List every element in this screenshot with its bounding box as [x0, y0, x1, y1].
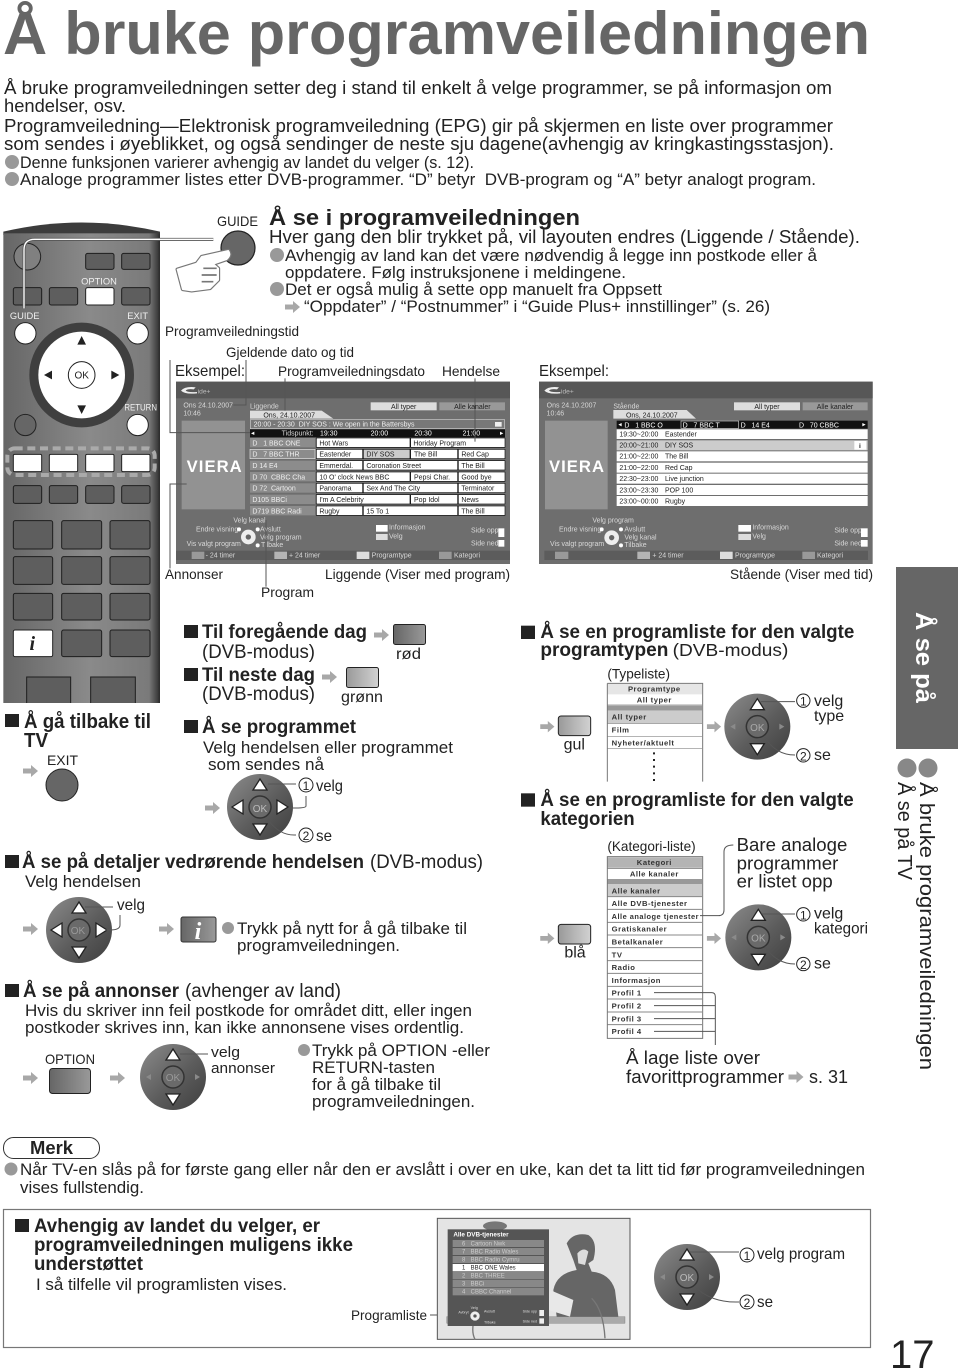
- screen: portrait program guide: The Bill: [665, 454, 689, 461]
- section: event details: Trykk på nytt for å gå tilbake til: [237, 919, 467, 938]
- note: Merk: [30, 1138, 74, 1158]
- intro text block: Denne funksjonen varierer avhengig av landet du velger (s. 12).: [20, 154, 474, 172]
- icon: pointing hand: [177, 251, 230, 291]
- screen: landscape program guide: Velg program: [260, 534, 302, 541]
- section: previous day: [184, 622, 426, 663]
- category table: Alle kanaler: [612, 886, 661, 895]
- screen: landscape program guide: ide+: [198, 388, 211, 395]
- category table: Betalkanaler: [612, 937, 663, 946]
- section: advertisements: Å se på annonser: [23, 981, 180, 1002]
- screen: landscape program guide: Pepsi Char.: [414, 474, 450, 481]
- guide connector line: [24, 239, 213, 308]
- screen: programme list: [437, 1218, 630, 1339]
- screen: landscape program guide: Vis valgt program: [187, 541, 241, 548]
- screen: landscape program guide: Velg kanal: [233, 518, 266, 525]
- screen: programme list: BBCi: [471, 1282, 484, 1288]
- remote button captions: GUIDE: [10, 311, 39, 321]
- screen: portrait program guide: 22:30~23:00: [619, 476, 658, 483]
- section: watch the programme: Å se programmet: [202, 717, 357, 738]
- panel: guide not supported: Programliste: [351, 1307, 427, 1323]
- guide section text: Avhengig av land kan det være nødvendig å legge inn postkode eller å: [285, 246, 818, 265]
- screen: landscape program guide: Panorama: [319, 486, 352, 493]
- section: advertisements: (avhenger av land): [185, 981, 341, 1002]
- screen: portrait program guide: Velg: [752, 533, 766, 540]
- screen annotations: Program: [261, 584, 314, 600]
- screen: landscape program guide: D 14 E4: [252, 463, 278, 470]
- screen: landscape program guide: The Bill: [461, 508, 485, 515]
- remote button captions: [10, 276, 157, 413]
- screen: landscape program guide: Side ned: [471, 540, 499, 547]
- screen: landscape program guide: [170, 360, 510, 587]
- screen: landscape program guide: 19:30: [320, 431, 338, 438]
- section: category list: kategorien: [540, 809, 635, 830]
- section: programme type list: Å se en programliste for den valgte: [540, 622, 854, 643]
- section: next day: grønn: [341, 689, 383, 706]
- screen: portrait program guide: D 7 BBC T: [683, 422, 721, 429]
- screen: portrait program guide: Velg program: [592, 518, 634, 525]
- side tab: Å se på: [910, 612, 938, 704]
- screen: landscape program guide: Tilbake: [261, 542, 283, 549]
- panel: guide not supported: velg program: [757, 1246, 845, 1263]
- category table: Profil 3: [612, 1014, 642, 1023]
- screen: landscape program guide: All typer: [391, 404, 417, 411]
- intro text block: Å bruke programveiledningen setter deg i stand til enkelt å velge programmer, se på informasjon om: [4, 78, 832, 98]
- section: category list: 1: [800, 908, 807, 922]
- screen: landscape program guide: Tidspunkt:: [282, 431, 314, 438]
- section: programme type list: 2: [800, 749, 807, 763]
- screen: landscape program guide: Sex And The City: [366, 486, 421, 493]
- intro text block: hendelser, osv.: [4, 96, 126, 116]
- screen: landscape program guide: D 70 CBBC Cha: [252, 474, 305, 481]
- section: category list: kategori: [814, 920, 868, 937]
- panel: guide not supported: I så tilfelle vil programlisten vises.: [36, 1275, 287, 1294]
- remote button captions: EXIT: [127, 311, 148, 321]
- type list table: Programtype: [628, 685, 681, 694]
- screen: programme list: Alle DVB-tjenester: [453, 1232, 509, 1239]
- remote button captions: OPTION: [81, 276, 117, 286]
- navigation pad: [227, 774, 293, 840]
- section: category list: [521, 790, 868, 1045]
- screen: landscape program guide: Ons, 24.10.2007: [263, 412, 315, 419]
- panel: guide not supported: understøttet: [34, 1254, 144, 1275]
- section: watch the programme: [184, 717, 453, 845]
- type list table: [607, 683, 703, 782]
- navigation ring: [29, 323, 134, 427]
- screen annotations: Programveiledningstid: [165, 323, 299, 339]
- screen annotations: Eksempel:: [175, 363, 245, 380]
- info button: [13, 630, 53, 657]
- section: programme type list: [521, 622, 854, 782]
- screen: landscape program guide: 21:00: [463, 431, 480, 438]
- screen annotations: Programveiledningsdato: [278, 363, 425, 379]
- info button: i: [30, 633, 36, 655]
- info button: i: [195, 919, 202, 945]
- screen: portrait program guide: Velg kanal: [624, 534, 657, 541]
- section: event details: [5, 852, 483, 963]
- screen: portrait program guide: 19:30~20:00: [619, 432, 658, 439]
- screen: landscape program guide: Programtype: [372, 552, 412, 559]
- screen annotations: Annonser: [165, 566, 223, 582]
- screen: landscape program guide: Horiday Program: [413, 440, 466, 447]
- panel: guide not supported: 1: [744, 1249, 751, 1263]
- screen: portrait program guide: Tilbake: [624, 542, 647, 549]
- section: category list: velg: [814, 905, 843, 922]
- guide button illustration: GUIDE: [217, 213, 258, 229]
- screen: landscape program guide: Ons 24.10.2007: [183, 403, 233, 410]
- screen: landscape program guide: D105 BBCi: [252, 497, 287, 504]
- guide section text: Hver gang den blir trykket på, vil layouten endres (Liggende / Stående).: [269, 227, 860, 247]
- type list table: All typer: [637, 695, 672, 704]
- screen: programme list: Cartoon Nwk: [471, 1242, 505, 1248]
- section: programme type list: velg: [814, 693, 843, 710]
- screen: landscape program guide: Emmerdal.: [319, 463, 353, 470]
- screen: landscape program guide: - 24 timer: [206, 552, 236, 559]
- intro text block: [4, 78, 834, 189]
- category table: Profil 4: [612, 1027, 642, 1036]
- screen: landscape program guide: News: [461, 497, 479, 504]
- section: watch the programme: se: [316, 828, 332, 845]
- navigation pad: [140, 1044, 206, 1110]
- section: programme type list: se: [814, 747, 831, 764]
- section: programme type list: (DVB-modus): [673, 640, 788, 660]
- section: programme type list: gul: [564, 737, 585, 754]
- screen: landscape program guide: Kategori: [454, 552, 480, 559]
- category table: Profil 2: [612, 1002, 642, 1011]
- screen: portrait program guide: Eastender: [665, 432, 698, 439]
- screen annotations: [165, 323, 873, 600]
- screen: landscape program guide: DIY SOS: [366, 452, 395, 459]
- screen: portrait program guide: Ons 24.10.2007: [547, 403, 596, 410]
- screen: portrait program guide: 20:00~21:00: [619, 443, 658, 450]
- side tab bullets: [898, 758, 938, 778]
- screen: landscape program guide: D 7 BBC THR: [252, 452, 300, 459]
- section: back to tv: Å gå tilbake til: [24, 709, 151, 733]
- section: category list: er listet opp: [737, 871, 833, 892]
- side tab subtitles: Å bruke programveiledningen: [915, 782, 938, 1070]
- screen: landscape program guide: 15 To 1: [366, 508, 389, 515]
- remote button captions: RETURN: [124, 403, 157, 413]
- screen: portrait program guide: [539, 382, 873, 564]
- section: advertisements: for å gå tilbake til: [312, 1075, 441, 1094]
- screen: programme list: CBBC Channel: [471, 1290, 511, 1296]
- note: Når TV-en slås på for første gang eller når den er avslått i over en uke, kan det ta litt tid før programveiledningen: [20, 1160, 865, 1179]
- section: watch the programme: 2: [303, 829, 310, 843]
- screen: portrait program guide: Live junction: [665, 476, 704, 483]
- intro text block: som sendes i øyeblikket, og også sendinger de neste sju dagene(avhengig av kringkastingsstasjon).: [4, 134, 834, 154]
- panel: guide not supported: se: [757, 1294, 773, 1311]
- screen: landscape program guide: 20:00: [371, 431, 388, 438]
- intro text block: Analoge programmer listes etter DVB-programmer. “D” betyr DVB-program og “A” betyr analogt program.: [20, 171, 816, 189]
- guide section text: Det er også mulig å sette opp manuelt fra Oppsett: [285, 280, 662, 299]
- note: [4, 1138, 865, 1197]
- annotation leader lines: [170, 360, 475, 587]
- section: back to tv: TV: [24, 730, 49, 752]
- screen: landscape program guide: Velg: [389, 533, 403, 540]
- screen: landscape program guide: 20:30: [414, 431, 432, 438]
- screen annotations: Liggende (Viser med program): [325, 566, 510, 582]
- screen: programme list: 2: [462, 1274, 466, 1280]
- section: event details: Velg hendelsen: [25, 872, 141, 891]
- section: previous day: Til foregående dag: [202, 622, 367, 643]
- section: advertisements: annonser: [211, 1060, 275, 1077]
- category table: Alle DVB-tjenester: [612, 899, 687, 908]
- section: previous day: rød: [396, 646, 421, 663]
- screen: programme list: 6: [462, 1242, 466, 1248]
- section: next day: (DVB-modus): [202, 684, 315, 705]
- section: event details: velg: [117, 897, 145, 914]
- screen: portrait program guide: Programtype: [735, 552, 775, 559]
- section: category list: se: [814, 955, 831, 972]
- screen: portrait program guide: Vis valgt program: [550, 541, 604, 548]
- screen: landscape program guide: Good bye: [461, 474, 492, 481]
- screen: landscape program guide: D719 BBC Radi: [252, 508, 302, 515]
- guide section text: [269, 204, 860, 316]
- screen: landscape program guide: Liggende: [250, 403, 279, 410]
- navigation pad: [46, 897, 112, 963]
- screen: portrait program guide: Endre visning: [559, 527, 601, 534]
- section: category list: blå: [564, 943, 586, 961]
- screen: programme list: BBC Radio Wales: [471, 1250, 518, 1256]
- screen: portrait program guide: POP 100: [665, 487, 693, 494]
- screen: programme list: Avslutt: [484, 1309, 495, 1313]
- favourite list note: Å lage liste over: [626, 1048, 760, 1068]
- favourite list note: s. 31: [809, 1067, 848, 1087]
- guide button illustration: [177, 213, 258, 291]
- screen: programme list: 8: [462, 1258, 466, 1264]
- screen: portrait program guide: D 70 CBBC: [799, 422, 839, 429]
- screen: portrait program guide: Alle kanaler: [817, 404, 854, 411]
- screen: portrait program guide: Ons, 24.10.2007: [626, 412, 678, 419]
- info button: [181, 917, 216, 945]
- side tab: [896, 567, 958, 749]
- screen: portrait program guide: D 1 BBC O: [624, 422, 663, 429]
- screen: portrait program guide: Kategori: [817, 552, 843, 559]
- type list table: Film: [612, 725, 629, 734]
- screen: landscape program guide: 20:00 - 20:30 DIY SOS : We open in the Battersbys: [254, 422, 415, 429]
- note: vises fullstendig.: [20, 1178, 144, 1197]
- section: programme type list: type: [814, 708, 844, 725]
- section: event details: programveiledningen.: [237, 936, 400, 955]
- section: previous day: (DVB-modus): [202, 642, 315, 663]
- screen: portrait program guide: Rugby: [665, 498, 686, 505]
- category table: TV: [612, 950, 623, 959]
- navigation pad: OK: [680, 1273, 695, 1284]
- navigation pad: OK: [253, 804, 268, 815]
- section: category list: 2: [800, 958, 807, 972]
- section: watch the programme: velg: [316, 778, 343, 795]
- unlabelled round button: [15, 414, 36, 436]
- section: advertisements: programveiledningen.: [312, 1092, 475, 1111]
- screen: landscape program guide: I'm A Celebrity: [319, 497, 364, 504]
- screen: landscape program guide: Red Cap: [461, 452, 489, 459]
- section: advertisements: postkoder skrives inn, kan ikke annonsene vises ordentlig.: [25, 1018, 464, 1037]
- screen: portrait program guide: 23:00~23:30: [619, 487, 658, 494]
- section: watch the programme: som sendes nå: [208, 755, 325, 774]
- category table: Kategori: [637, 858, 672, 867]
- section: watch the programme: Velg hendelsen eller programmet: [203, 738, 453, 757]
- screen: portrait program guide: VIERA: [549, 457, 604, 476]
- title: Å bruke programveiledningen: [3, 0, 870, 67]
- side tab subtitles: [893, 782, 938, 1070]
- screen: portrait program guide: Stående: [613, 402, 639, 410]
- screen: landscape program guide: VIERA: [187, 457, 242, 476]
- screen: programme list: 1: [462, 1266, 466, 1272]
- screen: landscape program guide: The Bill: [461, 463, 485, 470]
- navigation ring: OK: [74, 371, 89, 382]
- screen: landscape program guide: Coronation Street: [366, 463, 421, 470]
- type list table: Nyheter/aktuelt: [612, 738, 674, 747]
- section: category list: Bare analoge: [737, 834, 847, 855]
- section: back to tv: EXIT: [47, 752, 78, 768]
- screen: programme list: BBC THREE: [471, 1274, 505, 1280]
- section: category list: Å se en programliste for den valgte: [540, 790, 854, 811]
- section: advertisements: OPTION: [45, 1051, 95, 1067]
- screen: portrait program guide: Informasjon: [752, 524, 789, 531]
- navigation pad: OK: [751, 934, 766, 945]
- section: programme type list: 1: [800, 695, 807, 709]
- navigation pad: [654, 1244, 720, 1310]
- screen: landscape program guide: 10:46: [183, 410, 201, 417]
- navigation pad: OK: [166, 1073, 181, 1084]
- section: event details: Å se på detaljer vedrørende hendelsen: [22, 852, 364, 873]
- section: category list: (Kategori-liste): [607, 838, 696, 854]
- screen: portrait program guide: Red Cap: [665, 465, 693, 472]
- type list table: All typer: [612, 712, 647, 721]
- navigation pad: OK: [750, 723, 765, 734]
- screen: landscape program guide: Avslutt: [260, 527, 281, 534]
- favourite list note: favorittprogrammer: [626, 1067, 784, 1087]
- section: back to tv: [5, 709, 151, 801]
- section: programme type list: programtypen: [540, 640, 668, 661]
- screen: portrait program guide: 10:46: [547, 410, 564, 417]
- panel: guide not supported: Avhengig av landet du velger, er: [34, 1216, 321, 1237]
- screen: landscape program guide: Hot Wars: [319, 440, 349, 447]
- screen: landscape program guide: 10 O' clock News BBC: [319, 474, 389, 481]
- screen: programme list: Velg: [471, 1306, 478, 1310]
- panel: guide not supported: [4, 1210, 870, 1348]
- screen: portrait program guide: i: [859, 443, 861, 450]
- category table: Alle kanaler: [630, 870, 679, 879]
- screen: landscape program guide: D 72 Cartoon: [252, 486, 296, 493]
- screen: landscape program guide: Rugby: [319, 508, 340, 515]
- screen: portrait program guide: All typer: [754, 404, 780, 411]
- screen: portrait program guide: + 24 timer: [652, 552, 684, 559]
- screen: programme list: Side ned: [523, 1319, 537, 1323]
- navigation pad: [724, 694, 790, 760]
- category table: Gratiskanaler: [612, 925, 667, 934]
- side tab subtitles: Å se på TV: [893, 782, 916, 881]
- section: advertisements: velg: [211, 1044, 240, 1061]
- screen: landscape program guide: Alle kanaler: [454, 404, 491, 411]
- screen annotations: Hendelse: [442, 363, 500, 379]
- section: advertisements: RETURN-tasten: [312, 1058, 435, 1077]
- section: advertisements: Trykk på OPTION -eller: [312, 1041, 490, 1060]
- screen: landscape program guide: Side opp: [471, 528, 499, 535]
- screen: landscape program guide: Informasjon: [389, 524, 426, 531]
- screen: portrait program guide: 21:00~22:00: [619, 454, 658, 461]
- screen: landscape program guide: Eastender: [319, 452, 352, 459]
- screen: landscape program guide: + 24 timer: [289, 552, 321, 559]
- guide section text: “Oppdater” / “Postnummer” i “Guide Plus+ innstillinger” (s. 26): [304, 297, 770, 316]
- screen: portrait program guide: DIY SOS: [665, 443, 694, 450]
- screen: portrait program guide: D 14 E4: [741, 422, 770, 429]
- screen: programme list: BBC ONE Wales: [471, 1266, 516, 1272]
- screen: landscape program guide: Terminator: [461, 486, 495, 493]
- category table: Profil 1: [612, 989, 642, 998]
- screen: programme list: 4: [462, 1290, 466, 1296]
- section: programme type list: (Typeliste): [607, 666, 670, 682]
- section: advertisements: Hvis du skriver inn feil postkode for området ditt, eller ingen: [25, 1001, 472, 1020]
- section: watch the programme: 1: [303, 779, 310, 793]
- screen: portrait program guide: Avslutt: [624, 527, 645, 534]
- section: next day: Til neste dag: [202, 665, 315, 686]
- option button: [86, 288, 114, 305]
- screen: programme list: BBC Radio Cymru: [471, 1258, 520, 1264]
- screen: programme list: Avbryt: [458, 1310, 469, 1314]
- section: advertisements: [5, 981, 490, 1111]
- navigation pad: [725, 904, 791, 970]
- section: next day: [184, 665, 383, 706]
- screen: portrait program guide: Side ned: [834, 540, 862, 547]
- category table: Alle analoge tjenester: [612, 912, 699, 921]
- screen: landscape program guide: D 1 BBC ONE: [252, 440, 301, 447]
- guide section text: oppdatere. Følg instruksjonene i meldingene.: [285, 263, 626, 282]
- screen: landscape program guide: Endre visning: [196, 527, 238, 534]
- panel: guide not supported: 2: [744, 1296, 751, 1310]
- screen: programme list: 7: [462, 1250, 466, 1256]
- screen annotations: Eksempel:: [539, 363, 609, 380]
- screen: programme list: Side opp: [523, 1310, 537, 1314]
- favourite list note: [626, 1048, 848, 1087]
- screen annotations: Stående (Viser med tid): [730, 566, 873, 582]
- screen: programme list: 3: [462, 1282, 466, 1288]
- category table: Radio: [612, 963, 635, 972]
- screen: portrait program guide: 21:00~22:00: [619, 465, 658, 472]
- screen annotations: Gjeldende dato og tid: [226, 344, 354, 360]
- guide section text: Å se i programveiledningen: [269, 204, 580, 230]
- screen: landscape program guide: Pop Idol: [414, 497, 440, 504]
- category table: Informasjon: [612, 976, 661, 985]
- coloured button group: [7, 448, 155, 475]
- section: event details: (DVB-modus): [370, 852, 483, 873]
- navigation pad: OK: [71, 926, 86, 937]
- section: category list: programmer: [737, 852, 838, 873]
- screen: portrait program guide: 23:00~00:00: [619, 498, 658, 505]
- screen: portrait program guide: Side opp: [834, 528, 862, 535]
- guide and exit buttons: [15, 323, 148, 436]
- remote control: [3, 222, 213, 713]
- screen: programme list: Tilbake: [484, 1320, 496, 1324]
- intro text block: Programveiledning—Elektronisk programveiledning (EPG) gir på skjermen en liste over programmer: [4, 116, 833, 136]
- screen: portrait program guide: ide+: [561, 388, 574, 395]
- category table: [607, 857, 703, 1038]
- screen: landscape program guide: The Bill: [414, 452, 438, 459]
- panel: guide not supported: programveiledningen muligens ikke: [34, 1235, 353, 1256]
